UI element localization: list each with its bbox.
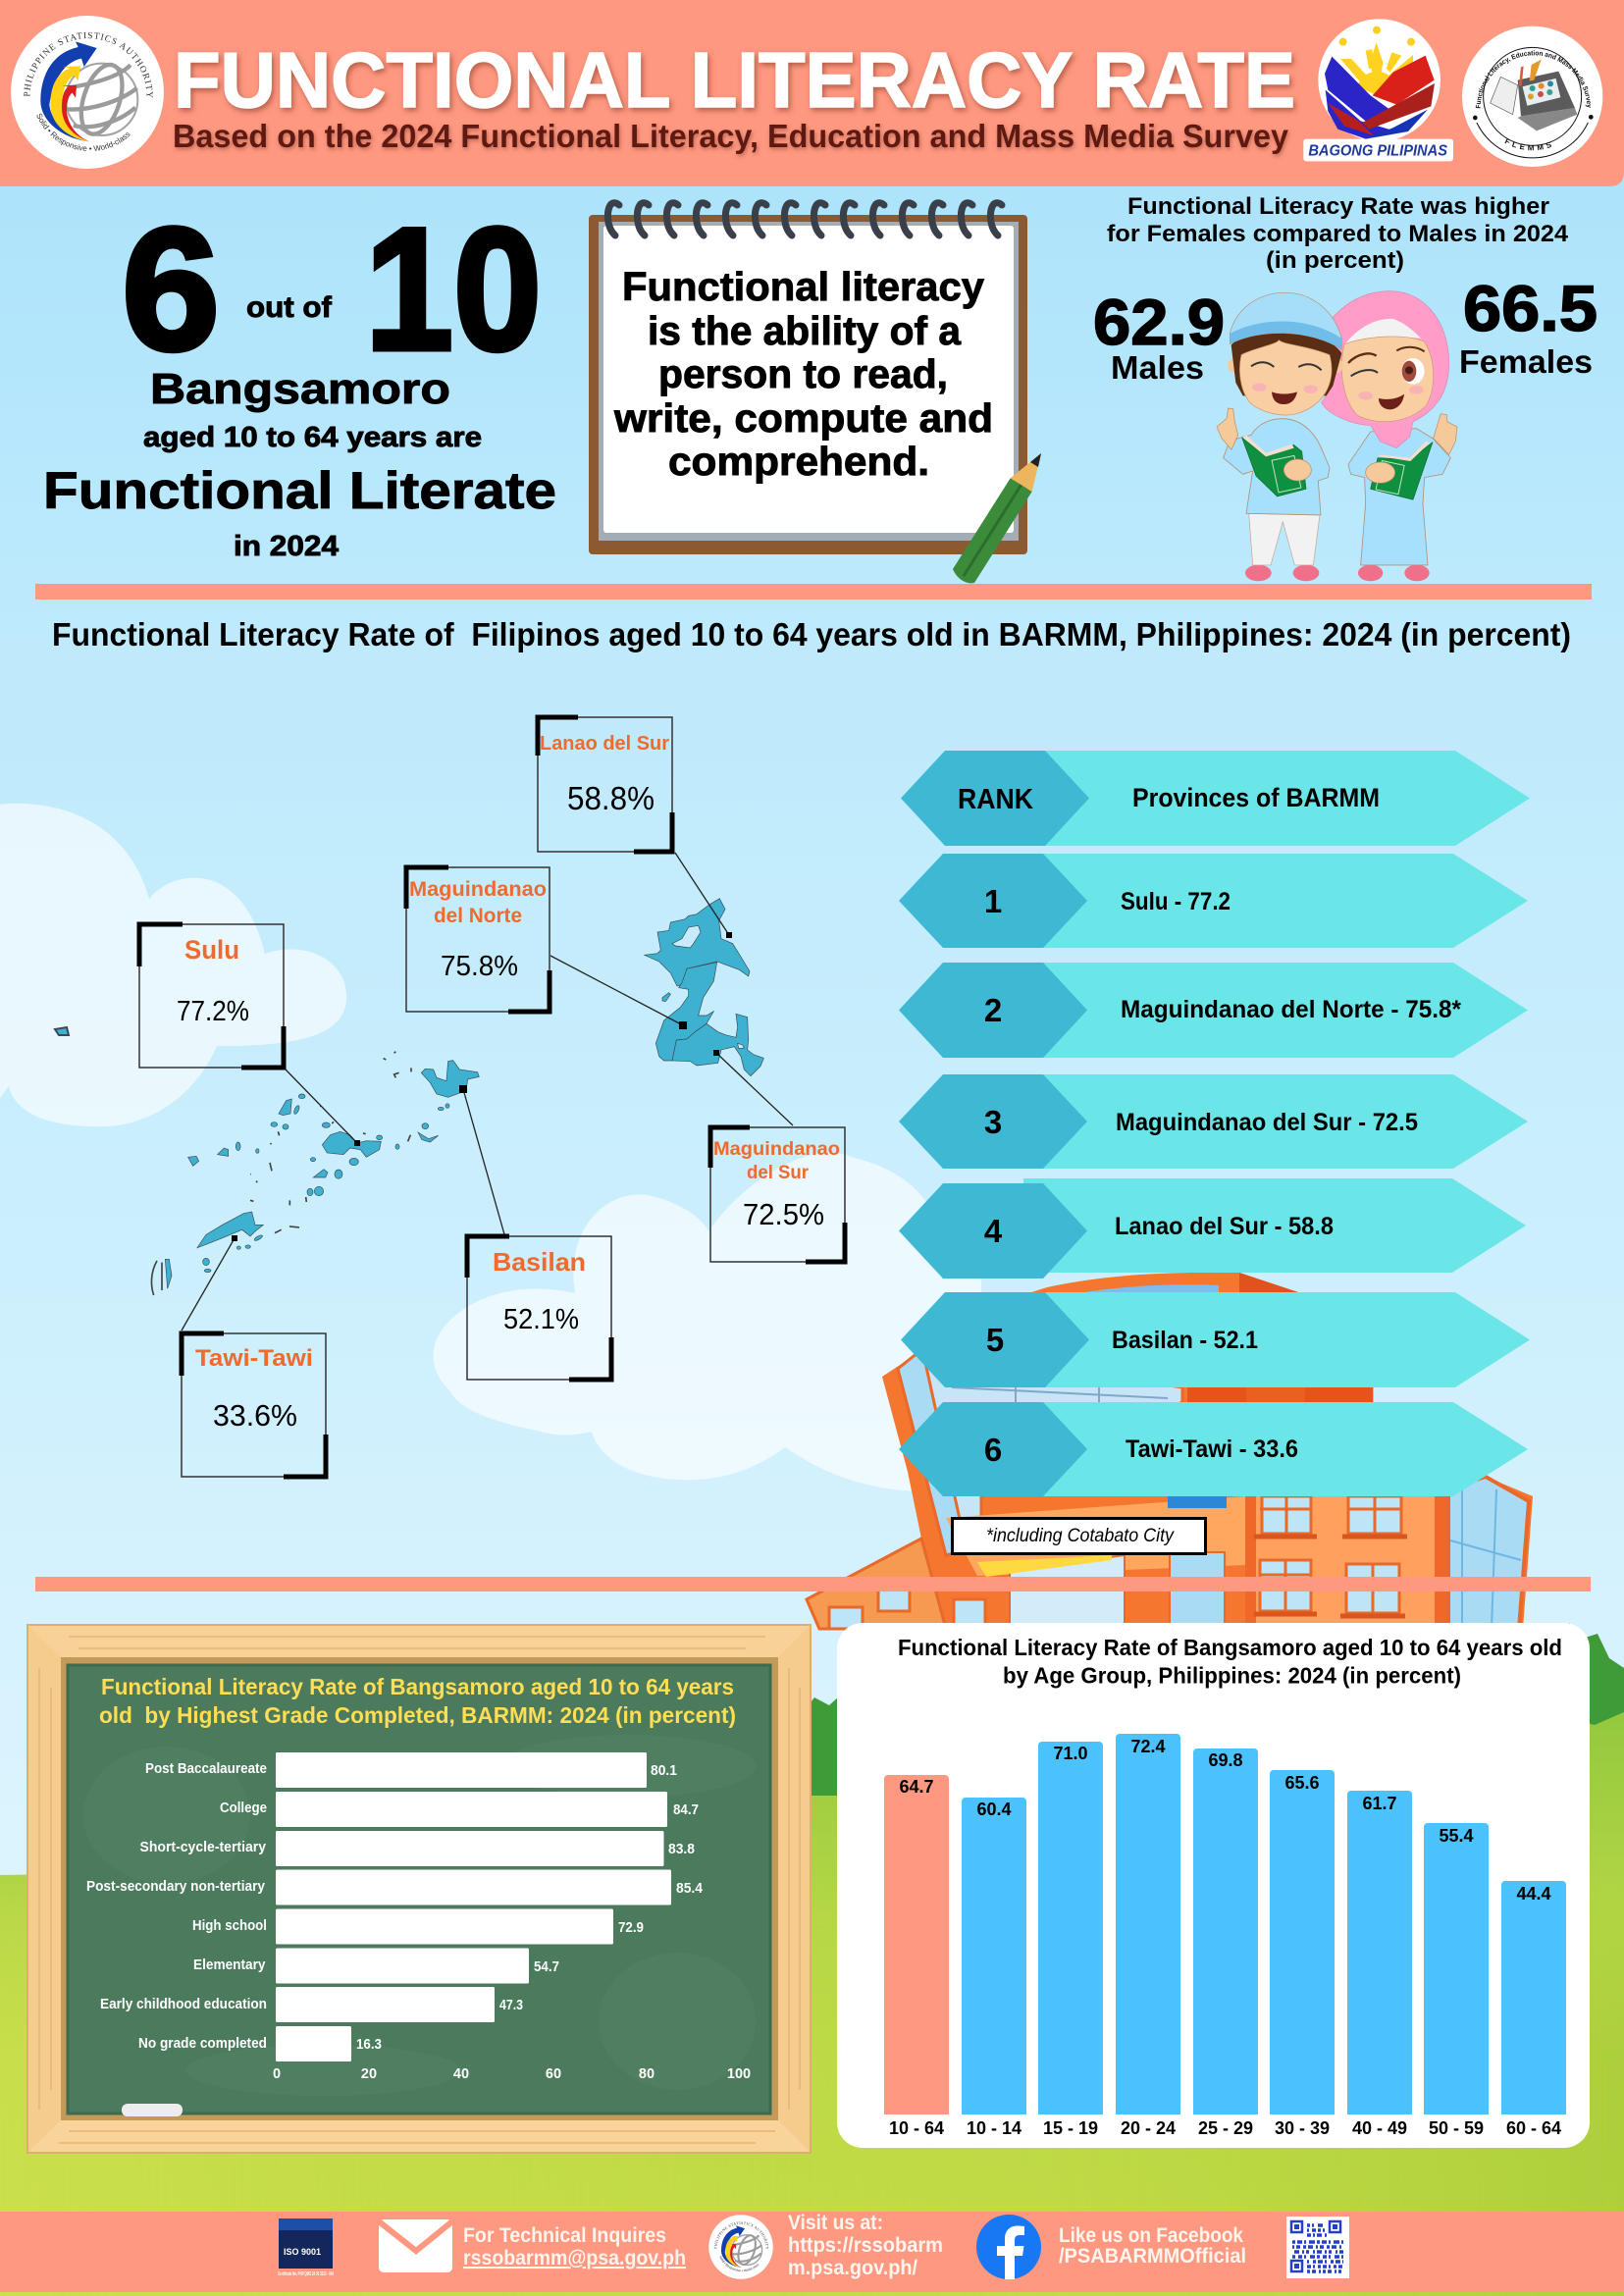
bushes [803, 1623, 1624, 1796]
map: mainland provinces [645, 899, 763, 1076]
callout: Maguindanao del Norte [406, 867, 550, 1012]
rank row 3: 3 [984, 1104, 1002, 1140]
Facebook page label [1059, 2224, 1246, 2268]
bar: 10-14: 60.4 [976, 1800, 1012, 1819]
age label: aged 10 to 64 years are [143, 422, 482, 453]
icon: chalk [122, 2104, 183, 2116]
bar chart: age group [884, 1734, 1566, 2138]
callout: Maguindanao del Sur [710, 1127, 845, 1262]
panel: chalkboard bar chart by grade completed [27, 1625, 811, 2153]
callout: Maguindanao del Norte: Maguindanao [409, 878, 547, 901]
Functional Literate label: Functional Literate [43, 462, 556, 520]
chart title: Functional Literacy Rate of Bangsamoro aged 10 to 64 years [101, 1674, 734, 1699]
bar: 10-64 [884, 1775, 949, 2138]
callout: Basilan: 52.1% [503, 1304, 579, 1335]
icon: PSA logo [11, 16, 164, 169]
bar: 15-19: 15 - 19 [1043, 2118, 1098, 2138]
rank row 4: Lanao del Sur - 58.8 [1115, 1213, 1334, 1240]
icon: spiral binding [607, 203, 1002, 235]
panel heading: Functional Literacy Rate was higher [1127, 193, 1549, 220]
icon: FLEMMS logo: Functional Literacy, Education and Mass Media Survey [1476, 50, 1591, 108]
map of BARMM [55, 717, 845, 1477]
footnote [952, 1519, 1205, 1554]
bar: Post Baccalaureate: 80.1 [651, 1763, 677, 1779]
bar: Early childhood education: 47.3 [499, 1998, 523, 2013]
callout: Lanao del Sur: 58.8% [567, 780, 655, 816]
icon: mail [379, 2219, 452, 2272]
grass hill background [0, 1712, 1624, 2296]
chart title: by Age Group, Philippines: 2024 (in percent) [1003, 1662, 1461, 1688]
icon: PSA logo small [708, 2215, 773, 2279]
callout: Sulu: 77.2% [177, 996, 249, 1027]
bar: 15-19: 71.0 [1053, 1744, 1088, 1763]
map: island provinces [151, 1052, 479, 1295]
panel: notebook definition [589, 203, 1041, 583]
website link: https://rssobarm [788, 2234, 943, 2257]
website link [788, 2212, 943, 2279]
bar: No grade completed: 16.3 [356, 2037, 382, 2053]
x axis labels: 20 [361, 2066, 377, 2082]
bar: 40-49: 40 - 49 [1352, 2118, 1407, 2138]
bar: 10-64: 64.7 [899, 1777, 934, 1797]
icon: PSA logo small: PHILIPPINE STATISTICS AUTHORITY [714, 2221, 768, 2249]
bar: 10-64: 10 - 64 [889, 2118, 944, 2138]
bar: Short-cycle-tertiary [139, 1831, 695, 1866]
rank row 6 [899, 1402, 1528, 1496]
rank header row: Provinces of BARMM [1132, 783, 1380, 812]
bar: 25-29: 25 - 29 [1198, 2118, 1253, 2138]
bar: 30-39 [1270, 1770, 1335, 2138]
icon: PSA logo: PHILIPPINE STATISTICS AUTHORITY [24, 31, 153, 98]
bar: Elementary [193, 1949, 559, 1984]
icon: ISO badge [278, 2218, 334, 2277]
bar: 60-64: 44.4 [1516, 1884, 1551, 1904]
icon: Facebook [976, 2215, 1041, 2279]
rank row 5: 5 [986, 1322, 1004, 1358]
bar: Early childhood education [100, 1987, 523, 2022]
technical inquiries contact: rssobarmm@psa.gov.ph [463, 2247, 686, 2270]
bar: Early childhood education: Early childhood education [100, 1997, 267, 2012]
ranking table [899, 751, 1530, 1554]
bar: Short-cycle-tertiary: Short-cycle-tertiary [139, 1840, 266, 1855]
bar: 50-59 [1424, 1823, 1489, 2138]
callout: Sulu [139, 924, 284, 1068]
icon: boy and girl reading [1217, 291, 1457, 581]
big number 6: 6 [122, 191, 220, 387]
x axis labels: 40 [453, 2066, 469, 2082]
definition text: Functional literacy [622, 264, 984, 309]
section heading: BARMM map: Functional Literacy Rate of Filipinos aged 10 to 64 years old in BARMM, Philippines: 2024 (in percent) [52, 616, 1571, 652]
icon: PSA logo small: Solid • Responsive • World-class [719, 2256, 760, 2272]
Facebook page label: /PSABARMMOfficial [1059, 2245, 1246, 2268]
header banner [0, 0, 1624, 186]
map: far western islet [55, 1027, 69, 1035]
rank header row [901, 751, 1530, 846]
panel heading [1107, 193, 1569, 274]
bar: 20-24 [1116, 1734, 1180, 2138]
icon: Bagong Pilipinas logo [1303, 19, 1453, 161]
female value: 66.5 [1463, 272, 1598, 344]
definition text: write, compute and [613, 395, 993, 441]
chalkboard surface [68, 1665, 770, 2113]
divider [35, 1577, 1591, 1592]
technical inquiries contact: For Technical Inquires [463, 2224, 666, 2247]
x axis labels: 0 [273, 2066, 281, 2082]
boy figure [1217, 292, 1343, 581]
bar: High school: 72.9 [618, 1920, 644, 1936]
out of label: out of [246, 291, 333, 324]
bar: 30-39: 65.6 [1284, 1773, 1320, 1793]
definition text: comprehend. [668, 439, 929, 484]
callout: Maguindanao del Norte: del Norte [434, 905, 522, 927]
panel: column chart by age group [837, 1623, 1590, 2148]
website link: m.psa.gov.ph/ [788, 2257, 917, 2279]
chalk smudges texture [83, 1735, 756, 2096]
x axis labels [273, 2066, 751, 2082]
icon: FLEMMS logo: FLEMMS [1505, 138, 1551, 151]
rank row 1: Sulu - 77.2 [1121, 888, 1231, 915]
male label: Males [1111, 349, 1204, 386]
bar: Post-secondary non-tertiary: 85.4 [676, 1881, 703, 1897]
callout: Tawi-Tawi: 33.6% [213, 1398, 297, 1433]
bar: 60-64 [1501, 1881, 1566, 2138]
bar: Short-cycle-tertiary: 83.8 [668, 1842, 695, 1857]
bar: No grade completed: No grade completed [138, 2036, 267, 2052]
icon: PSA logo: Solid • Responsive • World-class [37, 114, 130, 151]
bar: 10-14 [962, 1798, 1026, 2138]
rank row 2 [899, 963, 1528, 1058]
rank header row: RANK [958, 784, 1033, 815]
girl figure [1322, 291, 1457, 581]
bar: College: College [220, 1800, 267, 1816]
footnote: *including Cotabato City [986, 1526, 1175, 1546]
rank row 6: Tawi-Tawi - 33.6 [1126, 1435, 1298, 1463]
rank row 2: 2 [984, 992, 1002, 1028]
chart title [99, 1674, 736, 1728]
rank row 4: 4 [984, 1213, 1003, 1249]
bar chart: grade completed [86, 1752, 751, 2082]
rank row 3: Maguindanao del Sur - 72.5 [1116, 1109, 1418, 1136]
rank row 3 [899, 1074, 1528, 1169]
bar: Post Baccalaureate: Post Baccalaureate [145, 1761, 267, 1777]
panel: 6 out of 10 [43, 191, 556, 562]
bar: 20-24: 72.4 [1130, 1737, 1166, 1756]
x axis labels: 100 [727, 2066, 751, 2082]
panel heading: (in percent) [1266, 247, 1404, 274]
callout: Basilan [467, 1236, 611, 1380]
rank row 2: Maguindanao del Norte - 75.8* [1121, 996, 1461, 1023]
subtitle: Based on the 2024 Functional Literacy, Education and Mass Media Survey [173, 118, 1289, 154]
bar: Post-secondary non-tertiary [86, 1870, 703, 1905]
rank row 1 [899, 854, 1528, 948]
Bangsamoro label: Bangsamoro [150, 365, 450, 413]
panel: female and male rates [1093, 193, 1598, 581]
icon: pencil [953, 453, 1041, 583]
x axis labels: 60 [546, 2066, 561, 2082]
bar: 40-49: 61.7 [1362, 1794, 1397, 1813]
male value: 62.9 [1093, 286, 1225, 358]
technical inquiries contact [463, 2224, 686, 2270]
panel heading: for Females compared to Males in 2024 [1107, 221, 1569, 247]
bar: Post Baccalaureate [145, 1752, 677, 1788]
definition text [613, 264, 993, 484]
bar: High school: High school [192, 1918, 267, 1934]
bar: Elementary: 54.7 [534, 1959, 559, 1975]
female label: Females [1459, 343, 1593, 380]
footer bar [0, 2212, 1624, 2292]
map: connector lines [182, 853, 793, 1331]
bar: Elementary: Elementary [193, 1957, 265, 1973]
rank row 5 [901, 1292, 1530, 1387]
callout: Maguindanao del Sur: del Sur [747, 1163, 810, 1183]
bar: 30-39: 30 - 39 [1275, 2118, 1330, 2138]
bar: 60-64: 60 - 64 [1506, 2118, 1561, 2138]
bar: College [220, 1792, 699, 1827]
bar: High school [192, 1909, 644, 1945]
bar: 50-59: 50 - 59 [1429, 2118, 1484, 2138]
icon: QR code [1286, 2217, 1349, 2278]
icon: ISO badge: ISO 9001 [284, 2247, 321, 2257]
chart title: Functional Literacy Rate of Bangsamoro aged 10 to 64 years old [898, 1635, 1562, 1660]
bar: College: 84.7 [673, 1802, 699, 1818]
callout: Tawi-Tawi [182, 1333, 326, 1477]
title: FUNCTIONAL LITERACY RATE [174, 36, 1295, 124]
school building illustration [807, 1273, 1533, 1629]
callout: Maguindanao del Norte: 75.8% [441, 951, 518, 982]
website link: Visit us at: [788, 2212, 883, 2234]
bar: 10-14: 10 - 14 [967, 2118, 1022, 2138]
bar: Post-secondary non-tertiary: Post-secondary non-tertiary [86, 1879, 265, 1895]
definition text: person to read, [658, 351, 948, 396]
bar: 40-49 [1347, 1791, 1412, 2138]
chart title: old by Highest Grade Completed, BARMM: 2024 (in percent) [99, 1702, 736, 1728]
rank row 5: Basilan - 52.1 [1112, 1327, 1258, 1354]
chart title [898, 1635, 1562, 1688]
wooden frame [27, 1625, 811, 2153]
rank row 1: 1 [984, 883, 1002, 919]
rank row 6: 6 [984, 1432, 1002, 1468]
definition text: is the ability of a [648, 308, 962, 353]
icon: FLEMMS logo [1462, 26, 1603, 167]
big number 10: 10 [365, 191, 542, 387]
icon: Bagong Pilipinas logo: BAGONG PILIPINAS [1308, 142, 1448, 159]
callout: Lanao del Sur [538, 717, 672, 852]
callout: Tawi-Tawi: Tawi-Tawi [195, 1345, 313, 1372]
bar: 25-29 [1193, 1748, 1258, 2138]
x axis labels: 80 [639, 2066, 655, 2082]
callout: Lanao del Sur: Lanao del Sur [540, 733, 669, 755]
decorative clouds [0, 804, 981, 1490]
bar: 50-59: 55.4 [1439, 1826, 1474, 1846]
year label: in 2024 [234, 531, 339, 562]
bar: 25-29: 69.8 [1208, 1750, 1243, 1770]
bar: No grade completed [138, 2026, 382, 2061]
bar: 15-19 [1038, 1742, 1103, 2138]
icon: ISO badge: Certificate No. PHP QMS 24 93 3333 - 004 [278, 2271, 334, 2277]
callout: Sulu: Sulu [184, 935, 239, 965]
Facebook page label: Like us on Facebook [1059, 2224, 1243, 2247]
divider [35, 584, 1592, 600]
callout: Maguindanao del Sur: 72.5% [743, 1197, 824, 1231]
bar: 20-24: 20 - 24 [1121, 2118, 1176, 2138]
callout: Maguindanao del Sur: Maguindanao [713, 1139, 840, 1160]
rank row 4 [899, 1178, 1526, 1278]
callout: Basilan: Basilan [493, 1247, 586, 1277]
